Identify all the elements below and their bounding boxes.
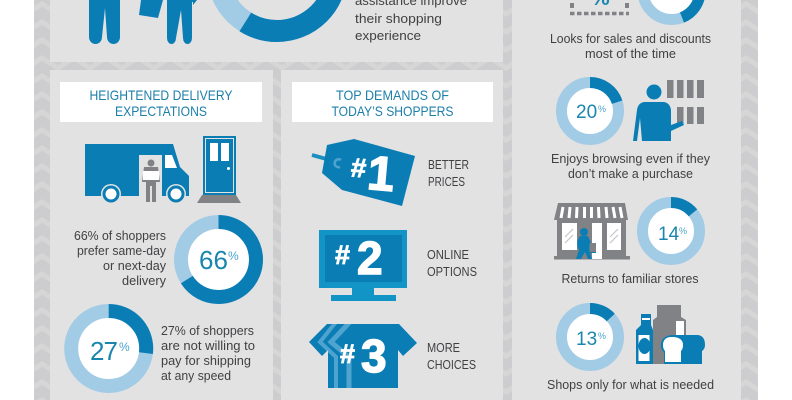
icon: person browsing racks xyxy=(633,80,704,141)
chart: 13 percent donut xyxy=(562,308,618,366)
text: shipping unwillingness: at any speed xyxy=(161,369,231,383)
text: shipping unwillingness: 27% of shoppers xyxy=(161,324,254,338)
text: more choices: MORE xyxy=(427,341,460,355)
text: only what is needed: Shops only for what is needed xyxy=(547,378,714,392)
text: shipping unwillingness: are not willing to xyxy=(161,339,255,353)
chart: 14 percent donut: % xyxy=(679,226,687,236)
icon: price tag number 1: 1 xyxy=(365,147,397,202)
chart: 20 percent donut: 20 xyxy=(576,102,597,123)
text: assistance improve: experience xyxy=(355,28,421,43)
icon: groceries xyxy=(636,305,705,364)
icon: shirt number 3: # xyxy=(340,339,355,369)
text: same-day delivery: prefer same-day xyxy=(77,244,167,258)
icon: shirt number 3: 3 xyxy=(361,330,387,382)
icon: monitor number 2 xyxy=(319,230,407,301)
text: sales and discounts: most of the time xyxy=(585,47,676,61)
icon: storefront with shopper xyxy=(554,203,630,260)
chart: 27 percent donut: 27 xyxy=(90,336,118,366)
text: shipping unwillingness xyxy=(161,324,255,383)
panel: shopper types xyxy=(512,0,741,400)
text: same-day delivery xyxy=(74,229,167,288)
icon: price tag number 1: # xyxy=(350,152,367,184)
text: familiar stores: Returns to familiar stores xyxy=(562,272,698,286)
text: enjoys browsing: Enjoys browsing even if they xyxy=(551,152,711,166)
text: better prices xyxy=(428,158,469,189)
chart: 20 percent donut xyxy=(562,82,618,140)
chart: 20 percent donut: % xyxy=(598,104,606,114)
heading: heightened delivery: HEIGHTENED DELIVERY xyxy=(90,87,233,103)
text: online options xyxy=(427,248,477,279)
chart: discounts donut xyxy=(643,0,700,20)
panel: heightened delivery expectations xyxy=(50,70,273,400)
chart: 66 percent donut xyxy=(181,222,256,297)
heading: heightened delivery xyxy=(60,82,262,122)
icon: front door xyxy=(197,136,241,203)
text: online options: ONLINE xyxy=(427,248,469,262)
chart: store assistance donut xyxy=(218,0,336,31)
heading: top demands: TOP DEMANDS OF xyxy=(336,87,449,103)
text: sales and discounts xyxy=(550,32,711,61)
text: more choices: CHOICES xyxy=(427,358,476,372)
icon: discount coupon xyxy=(570,0,629,14)
text: enjoys browsing xyxy=(551,152,711,181)
heading: top demands: TODAY’S SHOPPERS xyxy=(332,103,454,119)
icon: monitor number 2: 2 xyxy=(357,232,383,284)
text: online options: OPTIONS xyxy=(427,265,477,279)
text: assistance improve: their shopping xyxy=(355,11,442,26)
panel: top demands xyxy=(281,70,503,400)
chart: 27 percent donut xyxy=(71,311,146,386)
panel: store assistance xyxy=(50,0,503,62)
chart: 27 percent donut: % xyxy=(119,340,130,354)
heading: top demands xyxy=(292,82,493,122)
heading: heightened delivery: EXPECTATIONS xyxy=(115,103,207,119)
text: better prices: PRICES xyxy=(428,175,465,189)
text: enjoys browsing: don’t make a purchase xyxy=(568,167,693,181)
text: shipping unwillingness: pay for shipping xyxy=(161,354,251,368)
text: better prices: BETTER xyxy=(428,158,469,172)
icon: price tag number 1 xyxy=(312,139,415,206)
text: sales and discounts: Looks for sales and discounts xyxy=(550,32,711,46)
icon: shirt number 3 xyxy=(309,322,417,390)
chart: 13 percent donut: 13 xyxy=(576,329,597,350)
chart: 66 percent donut: 66 xyxy=(199,245,228,275)
text: same-day delivery: delivery xyxy=(122,274,167,288)
chart: 13 percent donut: % xyxy=(598,331,606,341)
chart: 14 percent donut xyxy=(642,202,700,260)
chart: 14 percent donut: 14 xyxy=(658,224,680,245)
text: assistance improve xyxy=(355,0,467,43)
icon: monitor number 2: # xyxy=(335,240,350,270)
icon: delivery truck xyxy=(85,144,189,204)
text: more choices xyxy=(427,341,476,372)
text: same-day delivery: or next-day xyxy=(103,259,167,273)
chart: 66 percent donut: % xyxy=(228,249,239,263)
text: same-day delivery: 66% of shoppers xyxy=(74,229,166,243)
icon: shoppers with bag xyxy=(89,0,197,44)
